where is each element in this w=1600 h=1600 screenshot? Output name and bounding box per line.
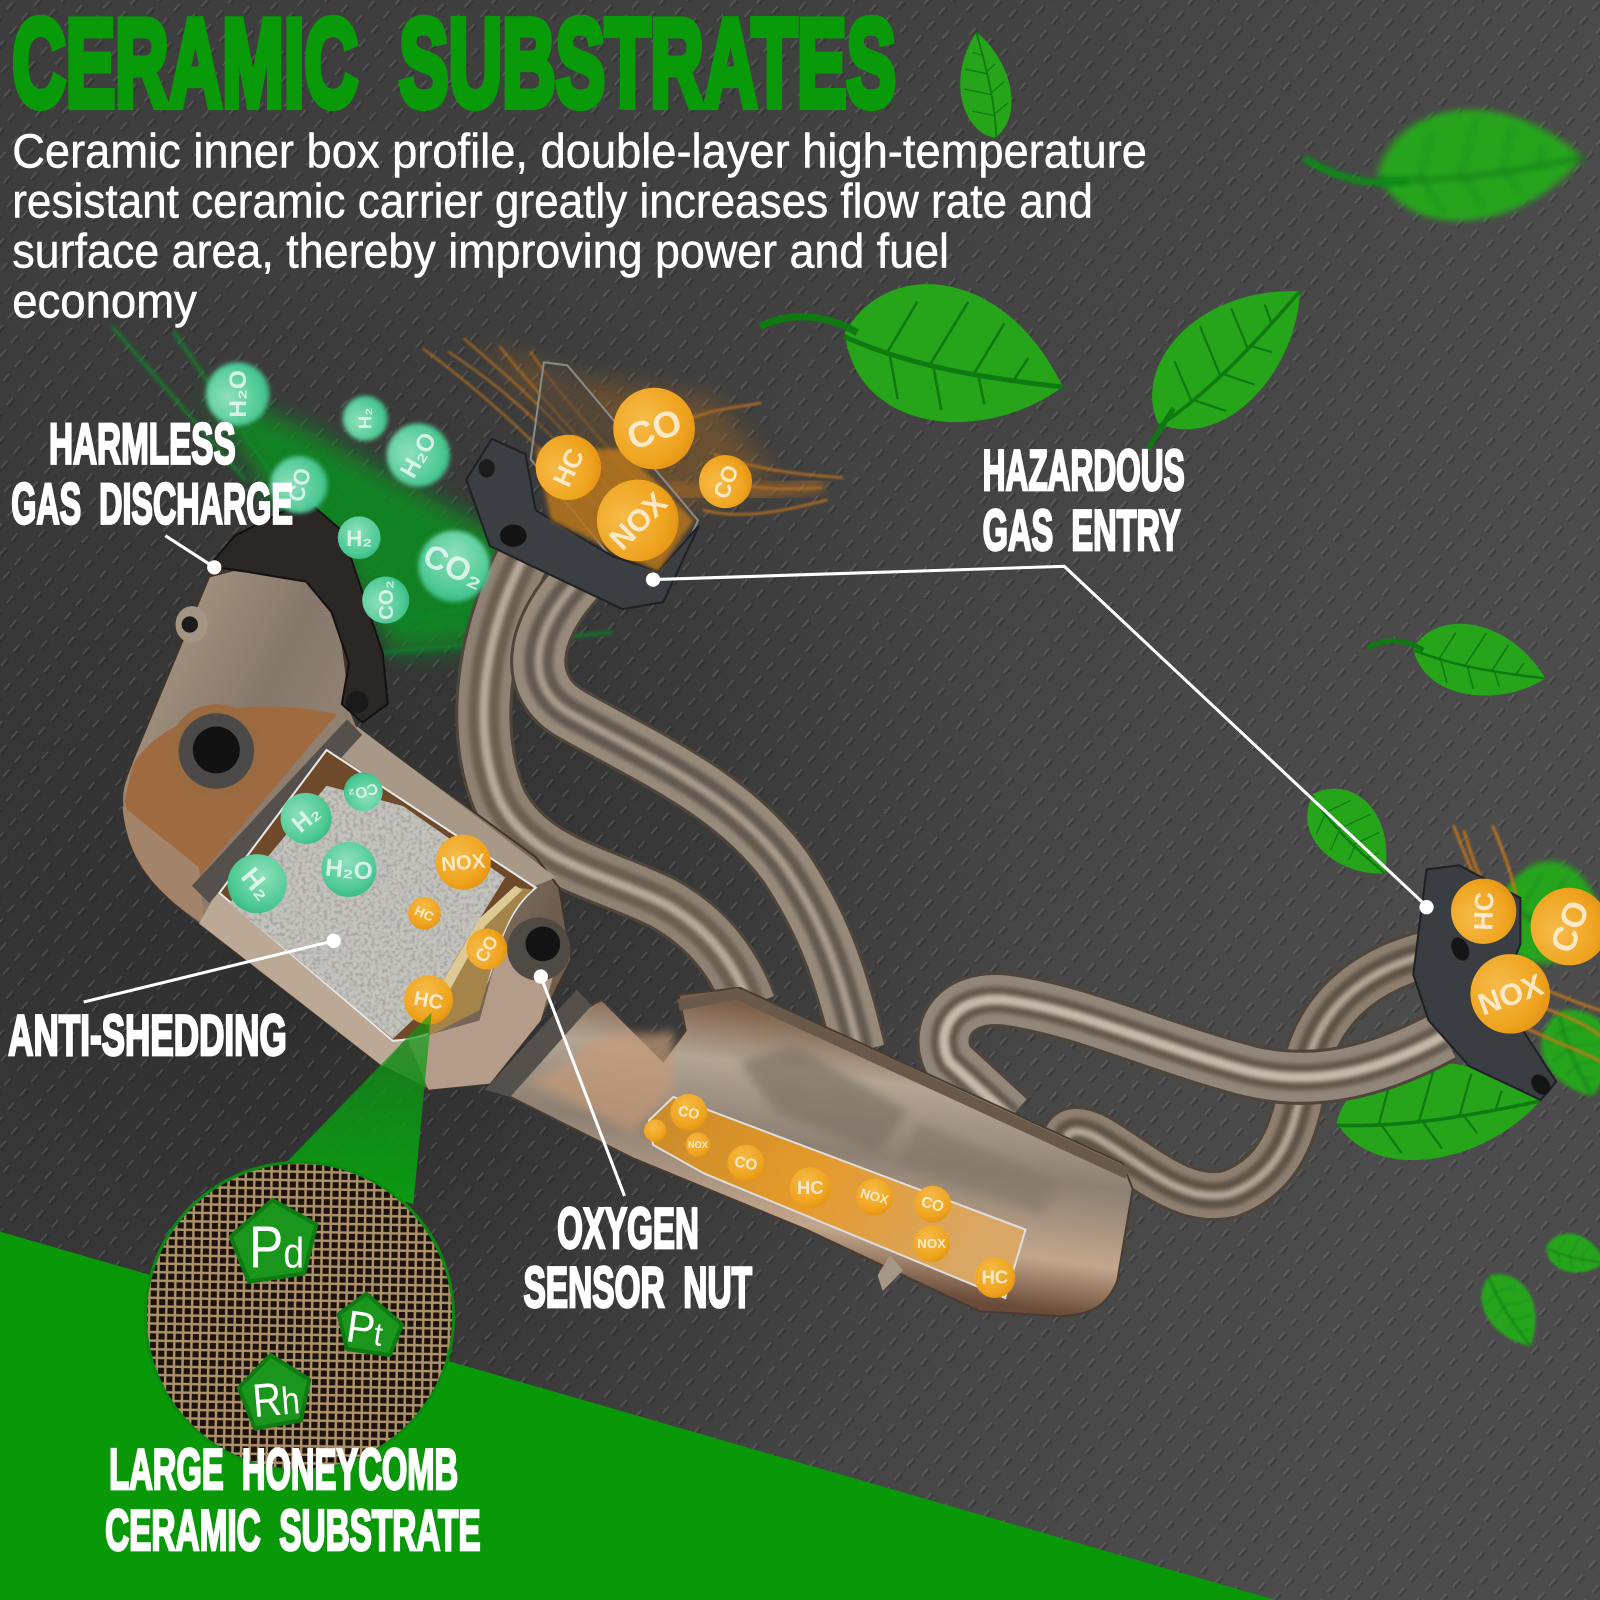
Pt tile: Pt [343,1300,387,1356]
orange gas balls: NOX [440,850,487,876]
Pd tile: Pd [249,1213,304,1280]
green gas balls: H₂ [287,799,326,838]
callout: hazardous gas entry [646,439,1434,914]
callout: oxygen sensor nut: OXYGEN [557,1197,699,1261]
green gas balls: CO₂ [347,779,380,803]
green gas balls: H₂ [346,526,372,551]
green gas balls: CO₂ [376,580,398,620]
orange gas streaks, right flange [1454,827,1600,1061]
orange gas balls: CO [733,1153,759,1174]
Pt tile [339,1294,402,1356]
green gas balls: CO [283,465,316,504]
orange gas balls: HC [982,1267,1008,1288]
oxygen boss [169,704,263,798]
orange gas balls: NOX [1474,968,1548,1022]
outlet flange [209,500,388,722]
left pipe pair [484,541,859,1051]
callout: harmless gas discharge: GAS DISCHARGE [11,472,293,536]
right inlet flange [1413,865,1556,1100]
orange gas balls: HC [412,903,436,925]
orange gas balls: CO [919,1193,946,1216]
orange gas balls: CO [677,1104,701,1123]
green gas balls: H₂O [324,855,374,886]
green gas balls: H₂O [225,370,252,418]
orange gas balls: NOX [603,485,675,557]
orange gas balls: NOX [688,1140,709,1150]
top inlet flange [466,362,699,609]
callout: oxygen sensor nut [523,969,752,1320]
green gas balls [206,362,502,925]
orange gas balls: NOX [859,1186,891,1208]
honeycomb magnifier [145,1162,454,1470]
orange gas balls: CO [470,932,502,966]
description text [12,125,1147,328]
orange gas balls: HC [547,444,590,491]
leaves [760,28,1600,1358]
callout: oxygen sensor nut: SENSOR NUT [523,1256,752,1320]
orange gas balls [400,376,1600,1298]
callout: hazardous gas entry: HAZARDOUS [983,439,1185,503]
description text: resistant ceramic carrier greatly increases flow rate and [12,175,1093,228]
magnifier beam [286,1012,432,1204]
orange gas balls: HC [412,988,445,1015]
label: large honeycomb ceramic substrate: CERAMIC SUBSTRATE [105,1499,481,1563]
pipes [484,541,1444,1196]
orange gas balls: NOX [917,1236,946,1251]
label: large honeycomb ceramic substrate: LARGE HONEYCOMB [109,1438,458,1502]
orange gas balls: CO [1544,896,1597,958]
oxygen sensor nut [507,917,570,981]
green gas glow [112,327,612,653]
first converter: cone [122,500,592,1097]
orange gas balls: HC [797,1177,823,1198]
right pipe pair [944,954,1444,1196]
callout: harmless gas discharge [11,412,293,574]
Rh tile: Rh [250,1371,302,1427]
orange gas streaks, top flange [423,339,842,520]
Rh tile [239,1355,309,1429]
orange gas balls: HC [1468,892,1500,931]
description text: surface area, thereby improving power and fuel [12,225,949,278]
green gas balls: H₂O [395,428,443,483]
second converter canister [510,988,1133,1316]
Pd tile [231,1200,316,1282]
green gas balls: H₂ [235,861,280,906]
green corner band [0,1232,1276,1600]
green gas balls: H₂ [354,408,375,429]
orange gas balls: CO [709,462,744,502]
cutaway window: substrate [219,750,536,1041]
callout: anti-shedding [8,934,341,1068]
description text: economy [12,275,197,328]
label: large honeycomb ceramic substrate [105,1438,481,1563]
cutaway window [649,1097,1026,1298]
callout: anti-shedding: ANTI-SHEDDING [8,1004,287,1068]
green gas balls: CO₂ [418,536,491,596]
description text: Ceramic inner box profile, double-layer high-temperature [12,125,1147,178]
orange gas balls: CO [621,401,687,458]
callout: harmless gas discharge: HARMLESS [49,412,236,476]
callout: hazardous gas entry: GAS ENTRY [983,499,1181,563]
